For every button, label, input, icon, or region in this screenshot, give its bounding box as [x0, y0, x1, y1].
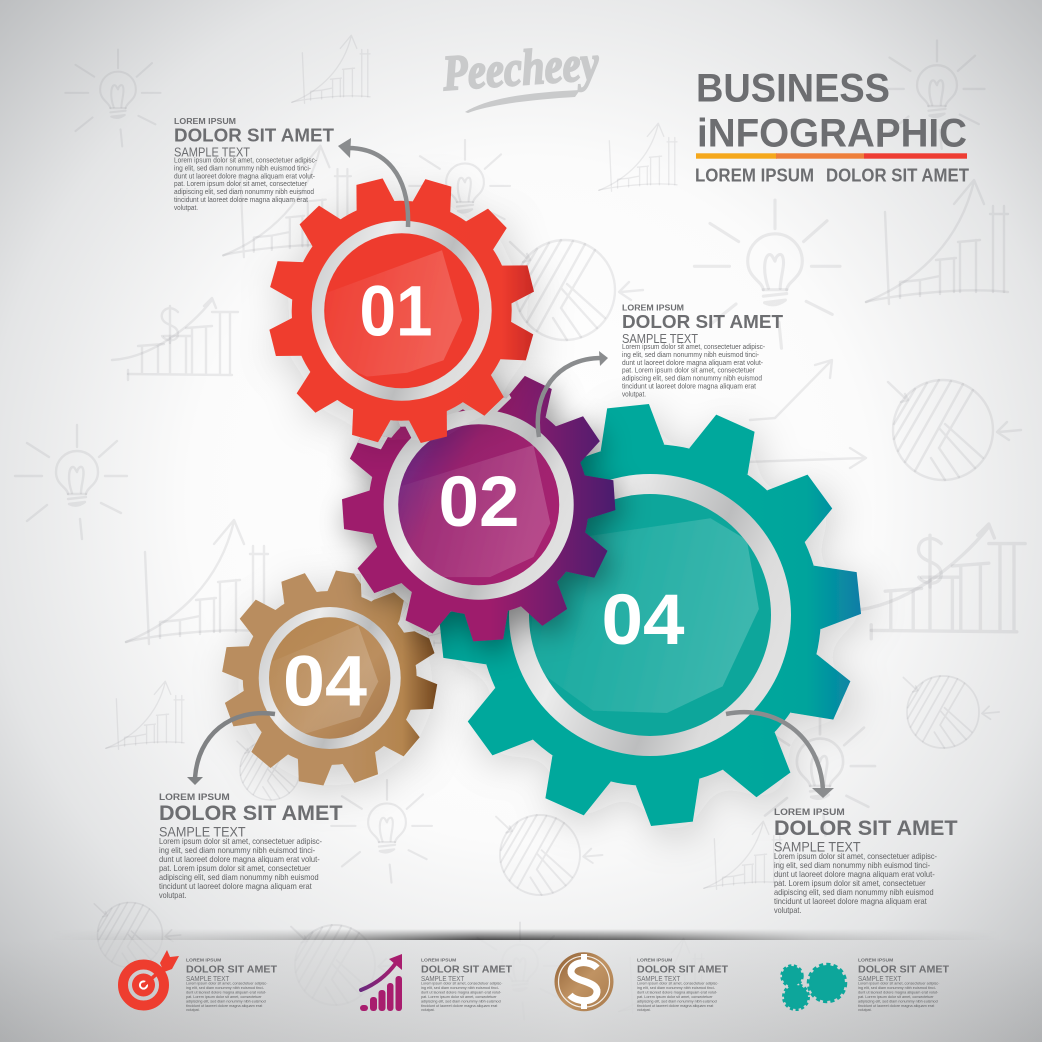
- text block: top left: [174, 117, 335, 212]
- text block: middle right: dunt ut laoreet dolore magna aliquam erat volut-: [622, 360, 764, 367]
- text block: lower left: DOLOR SIT AMET: [159, 802, 343, 825]
- text block: lower left: LOREM IPSUM: [159, 792, 230, 802]
- text block: middle right: volutpat.: [622, 391, 646, 398]
- gear 04: brown: [218, 570, 454, 806]
- text: coin item: pat. Lorem ipsum dolor sit amet, consectetuer: [637, 994, 713, 999]
- text: growth item: tincidunt ut laoreet dolore magna aliquam erat: [421, 1003, 498, 1008]
- text block: middle right: adipiscing elit, sed diam nonummy nibh euismod: [622, 376, 762, 383]
- icon: growth bars: [360, 954, 402, 1011]
- text block: top left: dunt ut laoreet dolore magna aliquam erat volut-: [174, 173, 316, 180]
- text: coin item: [637, 958, 729, 1012]
- text block: lower left: ing elit, sed diam nonummy nibh euismod tinci-: [159, 846, 316, 855]
- text block: lower left: pat. Lorem ipsum dolor sit amet, consectetuer: [159, 864, 311, 873]
- text: gears item: LOREM IPSUM: [858, 958, 893, 963]
- text block: lower right: adipiscing elit, sed diam nonummy nibh euismod: [774, 888, 934, 897]
- text block: lower right: pat. Lorem ipsum dolor sit amet, consectetuer: [774, 879, 926, 888]
- gear 04: brown: 04: [283, 643, 368, 722]
- text: target item: dunt ut laoreet dolore magna aliquam erat volut-: [186, 989, 267, 994]
- text: gears item: Lorem ipsum dolor sit amet, consectetuer adipisc-: [858, 980, 940, 985]
- text block: lower right: volutpat.: [774, 906, 801, 915]
- text block: lower left: Lorem ipsum dolor sit amet, consectetuer adipisc-: [159, 837, 322, 846]
- gear 01: red: 01: [360, 273, 432, 352]
- arrow: brown gear to text: [187, 713, 275, 785]
- text: gears item: SAMPLE TEXT: [858, 975, 902, 983]
- text block: lower right: dunt ut laoreet dolore magna aliquam erat volut-: [774, 870, 935, 879]
- title: [695, 67, 970, 186]
- text block: lower left: SAMPLE TEXT: [159, 824, 246, 840]
- text: target item: Lorem ipsum dolor sit amet, consectetuer adipisc-: [186, 980, 268, 985]
- icon: three gears: [782, 965, 845, 1009]
- text: growth item: DOLOR SIT AMET: [421, 964, 513, 976]
- text block: top left: tincidunt ut laoreet dolore magna aliquam erat: [174, 197, 308, 204]
- text: coin item: tincidunt ut laoreet dolore magna aliquam erat: [637, 1003, 714, 1008]
- text: growth item: LOREM IPSUM: [421, 958, 456, 963]
- text: growth item: dunt ut laoreet dolore magna aliquam erat volut-: [421, 989, 502, 994]
- text: target item: [186, 958, 278, 1012]
- text: target item: DOLOR SIT AMET: [186, 964, 278, 976]
- text block: lower right: SAMPLE TEXT: [774, 839, 861, 855]
- text block: middle right: Lorem ipsum dolor sit amet, consectetuer adipisc-: [622, 344, 766, 351]
- bottom strip background: [0, 929, 1042, 1042]
- text block: lower left: tincidunt ut laoreet dolore magna aliquam erat: [159, 882, 312, 891]
- text: coin item: LOREM IPSUM: [637, 958, 672, 963]
- title: DOLOR SIT AMET: [826, 165, 970, 186]
- text block: top left: LOREM IPSUM: [174, 117, 236, 126]
- text block: top left: adipiscing elit, sed diam nonummy nibh euismod: [174, 189, 314, 196]
- text block: middle right: tincidunt ut laoreet dolore magna aliquam erat: [622, 383, 756, 390]
- gear 02: purple: 02: [438, 463, 520, 542]
- arrow: gear 01 to text: [338, 138, 408, 227]
- title: BUSINESS: [696, 67, 890, 111]
- text: gears item: [858, 958, 950, 1012]
- gear 04: teal: 04: [602, 581, 685, 660]
- arrow: gear 02 to text: [538, 351, 608, 437]
- text block: middle right: LOREM IPSUM: [622, 304, 684, 312]
- text: gears item: DOLOR SIT AMET: [858, 964, 950, 976]
- text: coin item: DOLOR SIT AMET: [637, 964, 729, 976]
- text block: middle right: pat. Lorem ipsum dolor sit amet, consectetuer: [622, 368, 756, 375]
- text block: lower left: [159, 792, 343, 900]
- icon: dollar coin: [554, 952, 614, 1011]
- text: coin item: volutpat.: [637, 1007, 651, 1012]
- text block: lower right: ing elit, sed diam nonummy nibh euismod tinci-: [774, 861, 931, 870]
- text: growth item: pat. Lorem ipsum dolor sit amet, consectetuer: [421, 994, 497, 999]
- text: coin item: SAMPLE TEXT: [637, 975, 681, 983]
- text: coin item: adipiscing elit, sed diam nonummy nibh euismod: [637, 998, 717, 1003]
- text block: top left: ing elit, sed diam nonummy nibh euismod tinci-: [174, 166, 312, 172]
- text block: lower right: tincidunt ut laoreet dolore magna aliquam erat: [774, 897, 927, 906]
- text: coin item: ing elit, sed diam nonummy nibh euismod tinci-: [637, 985, 716, 990]
- text block: lower right: DOLOR SIT AMET: [774, 817, 958, 840]
- text block: lower left: adipiscing elit, sed diam nonummy nibh euismod: [159, 873, 319, 882]
- text: gears item: adipiscing elit, sed diam nonummy nibh euismod: [858, 998, 938, 1003]
- text block: top left: volutpat.: [174, 205, 198, 212]
- text: growth item: adipiscing elit, sed diam nonummy nibh euismod: [421, 998, 501, 1003]
- title: iNFOGRAPHIC: [697, 112, 967, 156]
- text: gears item: dunt ut laoreet dolore magna aliquam erat volut-: [858, 989, 939, 994]
- text: gears item: ing elit, sed diam nonummy nibh euismod tinci-: [858, 985, 937, 990]
- text: target item: LOREM IPSUM: [186, 958, 221, 963]
- gear 04: teal: [430, 395, 870, 835]
- text block: middle right: ing elit, sed diam nonummy nibh euismod tinci-: [622, 352, 760, 359]
- gear 01: red: [262, 170, 542, 450]
- text: target item: ing elit, sed diam nonummy nibh euismod tinci-: [186, 985, 265, 990]
- text block: top left: pat. Lorem ipsum dolor sit amet, consectetuer: [174, 181, 308, 188]
- arrow: teal gear to text: [726, 712, 834, 798]
- logo: Peecheey: Peecheey: [440, 34, 601, 101]
- text: growth item: volutpat.: [421, 1007, 435, 1012]
- text block: lower right: [774, 807, 958, 915]
- gear 02: purple: [330, 368, 635, 666]
- text block: top left: DOLOR SIT AMET: [174, 125, 335, 146]
- text block: lower right: LOREM IPSUM: [774, 807, 845, 817]
- text: growth item: SAMPLE TEXT: [421, 975, 465, 983]
- text block: middle right: DOLOR SIT AMET: [622, 311, 784, 332]
- text: target item: volutpat.: [186, 1007, 200, 1012]
- text: target item: tincidunt ut laoreet dolore magna aliquam erat: [186, 1003, 263, 1008]
- icon: target: [123, 950, 179, 1006]
- text: gears item: tincidunt ut laoreet dolore magna aliquam erat: [858, 1003, 935, 1008]
- text: growth item: ing elit, sed diam nonummy nibh euismod tinci-: [421, 985, 500, 990]
- text: target item: adipiscing elit, sed diam nonummy nibh euismod: [186, 998, 266, 1003]
- text block: lower right: Lorem ipsum dolor sit amet, consectetuer adipisc-: [774, 852, 937, 861]
- text block: middle right: [622, 304, 784, 398]
- text block: top left: Lorem ipsum dolor sit amet, consectetuer adipisc-: [174, 158, 318, 165]
- text: gears item: pat. Lorem ipsum dolor sit amet, consectetuer: [858, 994, 934, 999]
- text: coin item: dunt ut laoreet dolore magna aliquam erat volut-: [637, 989, 718, 994]
- text block: lower left: volutpat.: [159, 891, 186, 900]
- text: coin item: Lorem ipsum dolor sit amet, consectetuer adipisc-: [637, 980, 719, 985]
- text: target item: pat. Lorem ipsum dolor sit amet, consectetuer: [186, 994, 262, 999]
- text: gears item: volutpat.: [858, 1007, 872, 1012]
- text: growth item: [421, 958, 513, 1012]
- title: LOREM IPSUM: [695, 165, 814, 186]
- text block: middle right: SAMPLE TEXT: [622, 332, 698, 346]
- text block: top left: SAMPLE TEXT: [174, 146, 250, 160]
- text: target item: SAMPLE TEXT: [186, 975, 230, 983]
- text: growth item: Lorem ipsum dolor sit amet, consectetuer adipisc-: [421, 980, 503, 985]
- text block: lower left: dunt ut laoreet dolore magna aliquam erat volut-: [159, 855, 320, 864]
- logo: Peecheey: [440, 34, 601, 113]
